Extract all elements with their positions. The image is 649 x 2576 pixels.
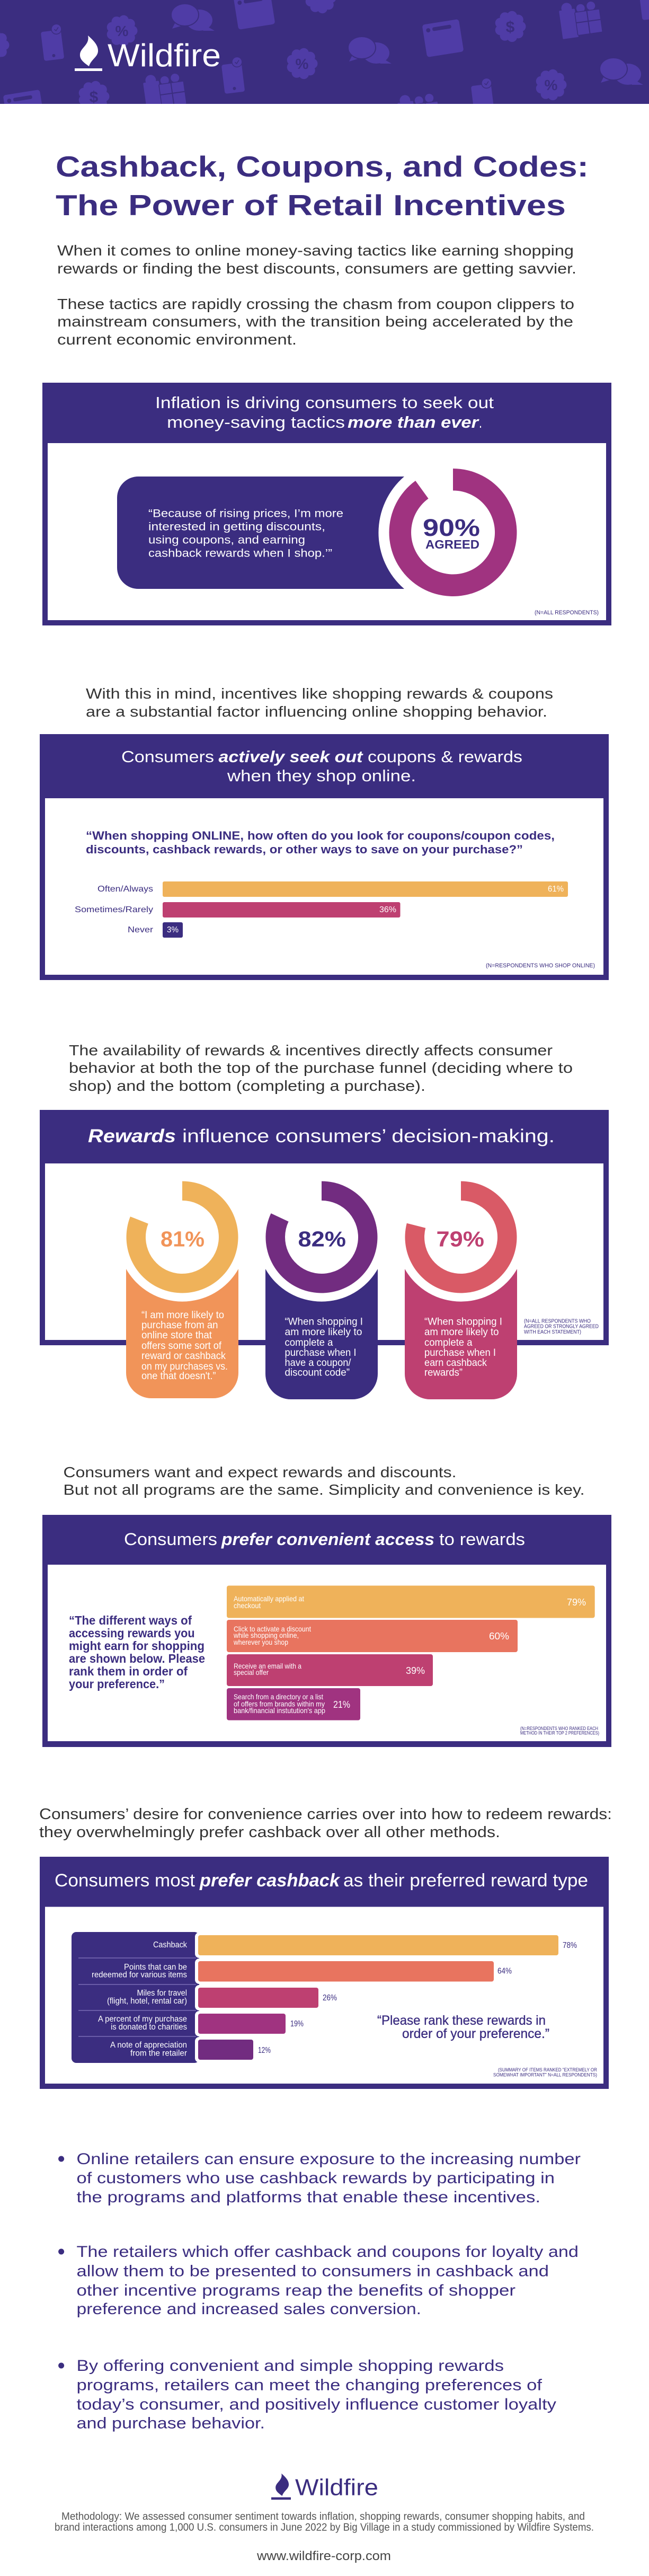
footnote [524,1318,599,1335]
intro text: These tactics are rapidly crossing the chasm from coupon clippers to [57,296,574,312]
bar chart: reward types: A note of appreciation [110,2041,187,2050]
website url: www.wildfire-corp.com [256,2549,391,2563]
panel heading: money-saving tactics [167,413,345,431]
bullet 2: preference and increased sales conversion. [76,2300,421,2318]
logo: Wildfire white [75,36,221,73]
text: purchase funnel: behavior at both the top of the purchase funnel (deciding where to [69,1060,573,1076]
bullet 1: the programs and platforms that enable these incentives. [76,2189,540,2206]
survey question: are shown below. Please [69,1652,205,1665]
quote block: “Because of rising prices, I’m more [148,508,343,519]
stat card: 81%: one that doesn't.” [141,1371,216,1382]
bullet 1: of customers who use cashback rewards by participating in [76,2169,555,2187]
stat card: 79% [405,1181,517,1399]
bar chart: reward types: Miles for travel [137,1989,187,1998]
intro text: When it comes to online money-saving tactics like earning shopping [57,242,574,259]
panel heading: when they shop online. [227,766,416,785]
stat card: 79%: purchase when I [424,1347,496,1358]
bar chart: frequency: 3% [167,925,179,934]
panel heading: coupons & rewards [368,747,522,766]
bar chart: reward types: from the retailer [130,2049,187,2058]
bullet 3: today’s consumer, and positively influence customer loyalty [76,2396,556,2413]
methodology note: Methodology: We assessed consumer sentiment towards inflation, shopping rewards, consumer shopping habits, and [61,2511,585,2522]
bar chart: access methods: special offer [234,1668,269,1677]
survey question [377,2013,549,2041]
panel: rewards influence [40,1110,609,1399]
bar chart: access methods: Automatically applied at [234,1594,304,1603]
panel heading: more than ever [348,413,479,431]
panel heading: . [479,413,482,431]
text: purchase funnel: The availability of rewards & incentives directly affects consumer [69,1042,553,1058]
bar chart: frequency: 36% [379,905,396,914]
footnote: (N=RESPONDENTS WHO RANKED EACH [520,1726,598,1732]
bar chart: access methods: Receive an email with a [234,1662,301,1670]
bar chart: access methods: 60% [489,1631,509,1642]
bar chart: reward types: A percent of my purchase [98,2015,187,2024]
bar chart: reward types [72,1932,577,2063]
bar chart: reward types: 78% [563,1941,577,1950]
footnote: WITH EACH STATEMENT) [524,1329,581,1335]
stat card: 79%: earn cashback [424,1357,487,1369]
stat card: 82%: 82% [298,1227,346,1251]
stat card: 82%: complete a [285,1337,333,1348]
text: purchase funnel [69,1042,573,1094]
intro text: current economic environment. [57,331,297,348]
panel heading: to rewards [439,1530,525,1549]
bar chart: frequency: Sometimes/Rarely [75,905,153,914]
bullet 1 [58,2150,581,2206]
footnote: (N=ALL RESPONDENTS) [535,610,599,616]
bar chart: frequency: 61% [548,885,564,894]
stat card: 79%: rewards” [424,1368,463,1378]
stat card: 81%: 81% [161,1227,205,1251]
panel heading [124,1530,525,1549]
panel: inflation [42,383,611,625]
intro text: rewards or finding the best discounts, consumers are getting savvier. [57,260,576,277]
text: simplicity and convenience: Consumers want and expect rewards and discounts. [64,1464,457,1480]
bar chart: access methods: checkout [234,1601,261,1610]
header icon pattern: $ [90,89,99,106]
text: redeem rewards: they overwhelmingly prefer cashback over all other methods. [39,1824,500,1841]
footnote: AGREED OR STRONGLY AGREED [524,1323,599,1329]
text: incentives intro [86,685,553,720]
text: incentives intro: With this in mind, incentives like shopping rewards & coupons [86,685,553,702]
survey question [69,1613,205,1691]
intro text [57,242,576,348]
bar chart: reward types: 19% [290,2019,304,2028]
survey question: rank them in order of [69,1664,188,1678]
header icon pattern [0,0,649,104]
stat card: 79%: “When shopping I [424,1317,502,1327]
text: redeem rewards [39,1806,612,1841]
panel heading: as their preferred reward type [343,1871,588,1891]
panel heading [121,747,522,785]
bullet 2: allow them to be presented to consumers in cashback and [76,2262,549,2280]
bar chart: access methods: Search from a directory or a list [234,1692,323,1701]
panel heading: actively seek out [218,747,363,766]
donut chart: 90% agreed: AGREED [425,537,479,551]
survey question: might earn for shopping [69,1639,205,1653]
footnote: (SUMMARY OF ITEMS RANKED "EXTREMELY OR [498,2067,597,2073]
header icon pattern: % [296,56,309,72]
panel heading: influence consumers’ decision-making. [182,1126,555,1146]
stat card: 79%: am more likely to [424,1327,499,1338]
stat card: 81%: online store that [141,1330,212,1341]
stat card: 82%: am more likely to [285,1327,362,1338]
panel heading: Consumers [121,747,214,766]
stat card: 79%: complete a [424,1337,473,1348]
panel heading [88,1126,555,1146]
text: redeem rewards: Consumers’ desire for convenience carries over into how to redeem rewards: [39,1806,612,1823]
bar chart: access methods: 39% [406,1665,425,1676]
survey question: “The different ways of [69,1613,192,1627]
quote block: using coupons, and earning [148,534,305,546]
survey question: accessing rewards you [69,1626,195,1640]
takeaway bullets [58,2150,581,2432]
survey question: order of your preference.” [402,2026,549,2041]
stat card: 82%: purchase when I [285,1347,356,1358]
bar chart: access methods: wherever you shop [233,1638,288,1646]
stat card: 81%: reward or cashback [141,1351,226,1362]
bar chart: reward types: is donated to charities [111,2023,187,2032]
header icon pattern: % [115,23,129,39]
bar chart: reward types: 12% [258,2046,271,2055]
donut chart: 90% agreed: 90% [423,514,480,541]
bar chart: access methods: 21% [333,1699,350,1710]
bar chart: access methods: of offers from brands within my [234,1699,325,1708]
bar chart: frequency: Often/Always [97,885,153,894]
footnote [520,1726,599,1736]
header icon pattern: % [545,77,558,93]
quote block: cashback rewards when I shop.’” [148,547,332,560]
bar chart: reward types: 64% [497,1966,512,1976]
bullet 3: and purchase behavior. [76,2415,265,2432]
bar chart: reward types: 26% [323,1993,337,2002]
bar chart: reward types: Points that can be [124,1963,187,1972]
bar chart: access methods [227,1586,595,1721]
quote block: interested in getting discounts, [148,521,325,533]
header icon pattern: $ [506,19,515,36]
panel: convenient access [42,1515,611,1747]
survey question: “When shopping ONLINE, how often do you look for coupons/coupon codes, [86,829,555,842]
panel: actively seek out [40,734,609,980]
logo: Wildfire white: Wildfire [108,38,221,73]
stat card: 81%: offers some sort of [141,1340,222,1352]
survey question: “Please rank these rewards in [377,2013,546,2028]
quote block [117,477,404,589]
bullet 3: programs, retailers can meet the changing preferences of [76,2377,543,2394]
footer logo: Wildfire purple [271,2474,378,2501]
stat card: 81% [126,1181,238,1398]
bar chart: reward types: (flight, hotel, rental car) [107,1997,187,2006]
survey question: discounts, cashback rewards, or other ways to save on your purchase?” [86,843,523,856]
bar chart: access methods: 79% [567,1597,586,1608]
intro text: mainstream consumers, with the transition being accelerated by the [57,313,573,330]
bullet 3 [58,2357,556,2432]
text: purchase funnel: shop) and the bottom (completing a purchase). [69,1078,425,1094]
stat card: 81%: purchase from an [141,1320,218,1331]
survey question: your preference.” [69,1677,165,1691]
bar chart: reward types: Cashback [153,1940,187,1949]
stat card: 81%: “I am more likely to [141,1310,224,1321]
stat card: 82%: discount code” [285,1368,350,1378]
stat card: 79%: 79% [437,1227,484,1251]
bar chart: access methods: Click to activate a discount [234,1625,311,1633]
bullet 2 [58,2243,579,2318]
panel heading: Inflation is driving consumers to seek out [155,393,494,412]
bullet 1: Online retailers can ensure exposure to the increasing number [76,2150,581,2168]
panel heading: Rewards [88,1126,176,1146]
header banner [0,0,649,104]
title [56,150,589,222]
footnote: METHOD IN THEIR TOP 2 PREFERENCES) [520,1730,599,1736]
panel heading: prefer convenient access [221,1530,434,1549]
text: incentives intro: are a substantial factor influencing online shopping behavior. [86,703,547,720]
bar chart: frequency [75,881,568,938]
title: The Power of Retail Incentives [56,189,566,222]
bar chart: access methods: while shopping online, [233,1631,299,1639]
panel heading: prefer cashback [199,1871,341,1891]
bar chart: reward types: redeemed for various items [92,1971,187,1979]
stat card: 82% [265,1181,378,1399]
bullet 2: other incentive programs reap the benefits of shopper [76,2282,515,2299]
footnote: (N=ALL RESPONDENTS WHO [524,1318,591,1324]
stat card: 82%: “When shopping I [285,1317,363,1327]
text: simplicity and convenience: But not all programs are the same. Simplicity and convenience is key. [64,1481,585,1498]
footnote [493,2067,597,2078]
footer logo: Wildfire purple: Wildfire [295,2474,378,2501]
stat card: 82%: have a coupon/ [285,1357,351,1369]
panel heading [55,1871,588,1891]
survey question [86,829,555,856]
bullet 2: The retailers which offer cashback and coupons for loyalty and [76,2243,579,2261]
methodology note [55,2511,594,2534]
footnote: SOMEWHAT IMPORTANT" N=ALL RESPONDENTS) [493,2072,597,2078]
panel heading: Consumers [124,1530,217,1549]
methodology note: brand interactions among 1,000 U.S. consumers in June 2022 by Big Village in a study commissioned by Wildfire Systems. [55,2522,594,2534]
stat card: 81%: on my purchases vs. [141,1361,228,1372]
text: simplicity and convenience [64,1464,585,1498]
bar chart: access methods: bank/financial instutution's app [234,1706,325,1715]
bar chart: frequency: Never [128,925,154,934]
panel: prefer cashback [40,1857,609,2089]
footnote: (N=RESPONDENTS WHO SHOP ONLINE) [486,963,595,969]
donut chart: 90% agreed [389,469,517,596]
title: Cashback, Coupons, and Codes: [56,150,589,183]
bullet 3: By offering convenient and simple shopping rewards [76,2357,504,2375]
panel heading [155,393,494,431]
panel heading: Consumers most [55,1871,195,1891]
